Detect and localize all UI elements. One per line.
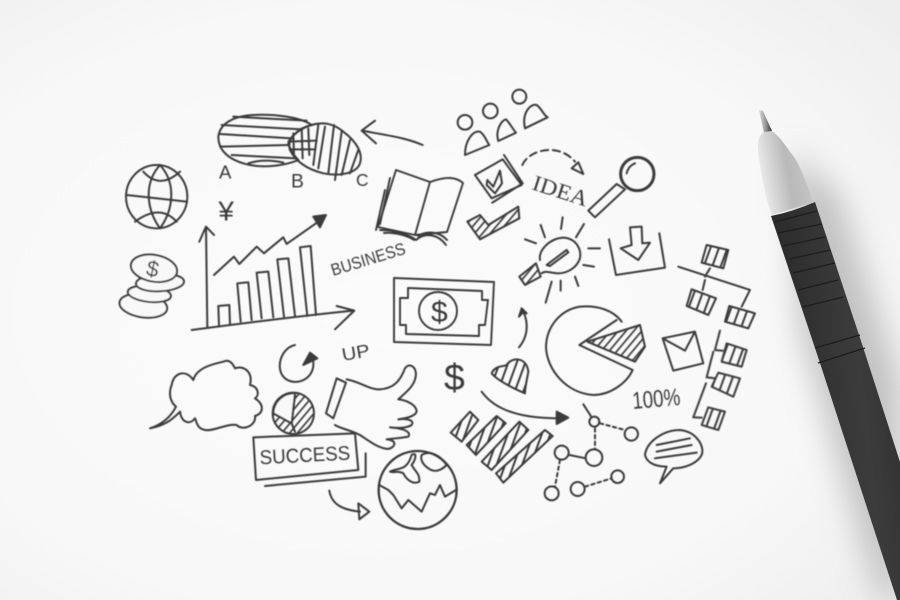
dashed arrow bbox=[522, 150, 583, 174]
org chart lower bbox=[693, 331, 747, 430]
envelope icon bbox=[663, 332, 703, 371]
hatched check mark bbox=[467, 207, 519, 239]
long curved arrow bbox=[482, 392, 568, 424]
yen symbol: ¥ bbox=[217, 196, 234, 227]
venn diagram with A B C: B bbox=[291, 171, 304, 192]
thumbs up hand bbox=[326, 366, 417, 449]
curved arrow up bbox=[519, 308, 527, 347]
cloud speech bubble bbox=[150, 361, 262, 430]
circular arrow bbox=[280, 345, 317, 382]
bar chart with rising arrow bbox=[192, 215, 354, 330]
magnifying glass bbox=[588, 157, 654, 217]
pen tip bbox=[759, 110, 772, 133]
speech bubble bbox=[645, 430, 702, 483]
venn diagram with A B C: C bbox=[356, 170, 368, 190]
arrow pointing to venn bbox=[362, 121, 423, 145]
coin stack: $ bbox=[144, 255, 161, 282]
pen grip ridges bbox=[775, 211, 865, 363]
label: idea: IDEA bbox=[529, 170, 591, 211]
label: business: BUSINESS bbox=[329, 239, 408, 280]
doodles bbox=[118, 90, 755, 529]
dollar bill: $ bbox=[431, 296, 448, 329]
label: 100 percent: 100% bbox=[631, 384, 681, 415]
hatched heart cloud bbox=[492, 359, 528, 393]
curved arrow to earth bbox=[329, 491, 369, 519]
org chart top bbox=[678, 245, 755, 328]
globe icon bbox=[126, 165, 187, 228]
pen shadow bbox=[790, 150, 900, 600]
pen silver cone bbox=[758, 131, 813, 215]
people group icon bbox=[458, 90, 548, 155]
venn diagram with A B C: A bbox=[219, 161, 232, 182]
big pie chart bbox=[546, 306, 645, 395]
dollar sign: $ bbox=[444, 356, 465, 398]
download box icon bbox=[609, 227, 665, 275]
success sign: SUCCESS bbox=[259, 443, 351, 469]
label: up: UP bbox=[340, 340, 371, 365]
open book bbox=[376, 170, 463, 245]
venn diagram with A B C bbox=[218, 115, 368, 192]
success sign bbox=[253, 433, 366, 486]
coin stack bbox=[118, 251, 184, 321]
small pie chart bbox=[273, 393, 314, 434]
network of nodes bbox=[545, 404, 638, 500]
dollar bill bbox=[394, 278, 494, 345]
pen bbox=[758, 110, 900, 600]
pen black grip and barrel bbox=[771, 202, 900, 600]
light bulb with rays bbox=[519, 217, 600, 303]
hatched bars bbox=[451, 412, 553, 483]
earth globe bbox=[379, 451, 457, 529]
checkbox card bbox=[475, 155, 523, 203]
